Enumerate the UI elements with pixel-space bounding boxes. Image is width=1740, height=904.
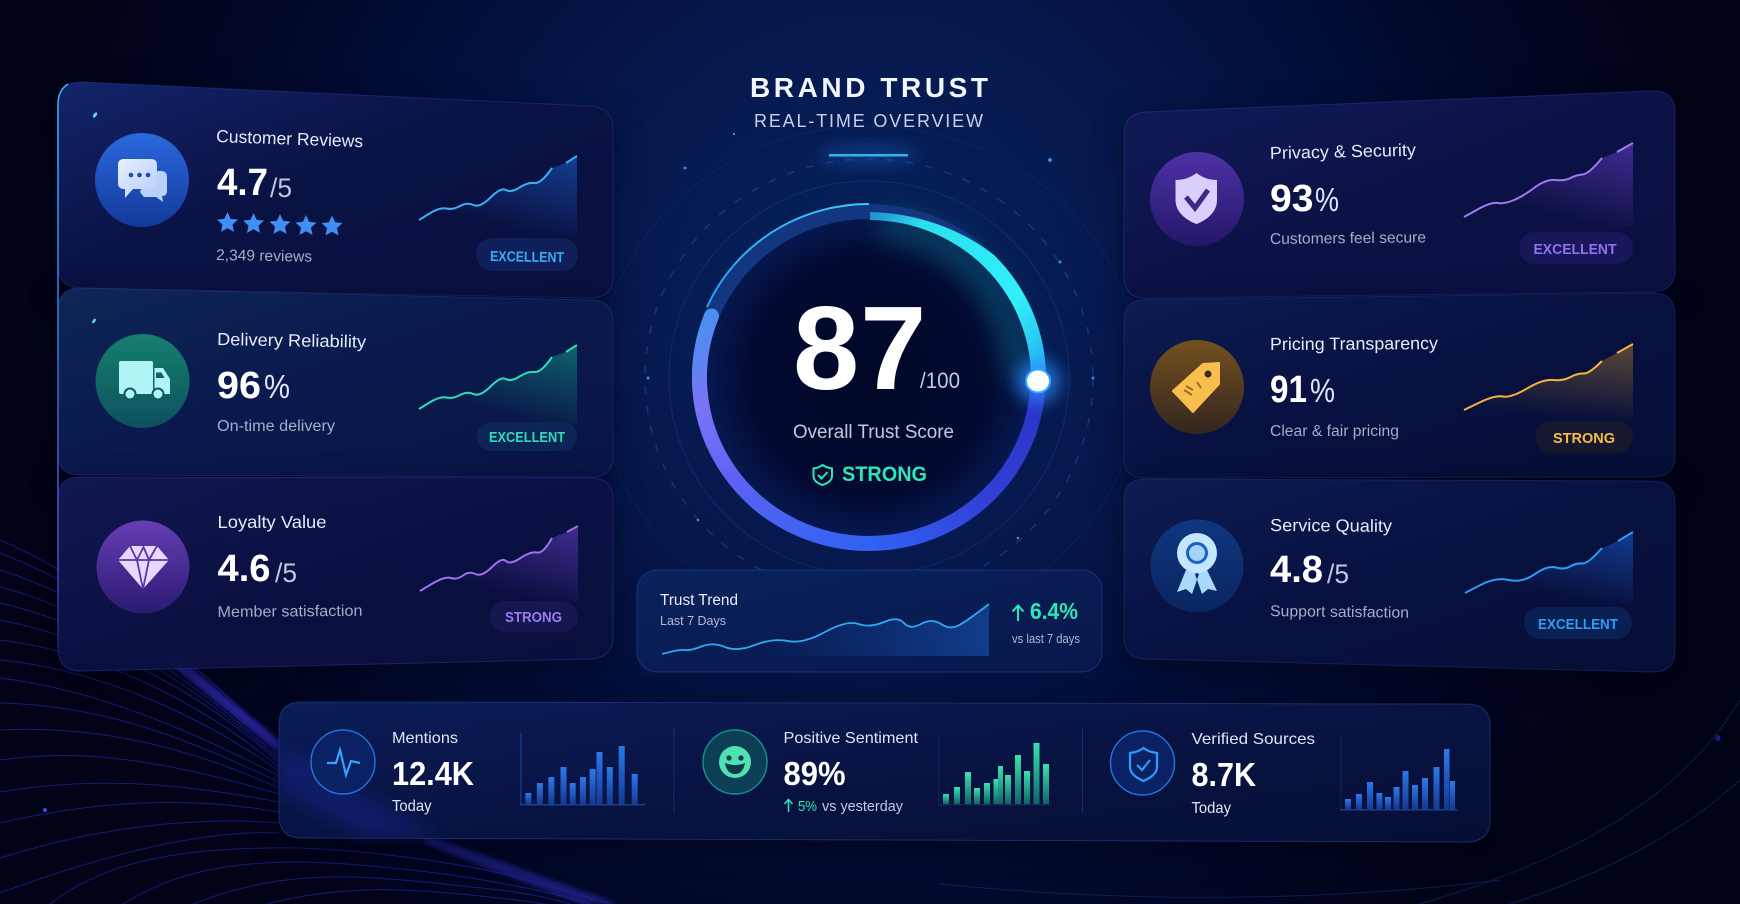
metric: 4.8 out of 5: 4.8 <box>1270 549 1323 591</box>
caption: last 7 days: Last 7 Days <box>660 613 726 628</box>
bar chart: sentiment <box>938 733 1052 806</box>
score label: Overall Trust Score <box>793 422 954 443</box>
background arcs: bottom right <box>940 700 1740 904</box>
trend value: 6.4% <box>1030 598 1078 624</box>
arrow: trend up <box>1012 606 1024 621</box>
badge: excellent <box>1524 607 1632 639</box>
metric: 4.8 out of 5: /5 <box>1327 559 1349 589</box>
sparkline: reviews <box>419 156 577 236</box>
heading: pricing transparency: Pricing Transparency <box>1270 333 1438 354</box>
icon: pulse <box>311 730 375 794</box>
badge: excellent: EXCELLENT <box>489 430 565 446</box>
badge: excellent: EXCELLENT <box>490 249 564 266</box>
icon: diamond <box>96 520 190 614</box>
heading: privacy and security: Privacy & Security <box>1270 140 1416 163</box>
metric: 96 percent: % <box>264 368 290 405</box>
panel: loyalty value <box>58 477 613 671</box>
status: strong: STRONG <box>842 463 927 486</box>
metric: 4.8 out of 5 <box>1270 549 1349 591</box>
panel: customer reviews <box>58 82 613 298</box>
sparkline: privacy <box>1464 143 1633 226</box>
sparkline: delivery <box>419 345 577 425</box>
trend comparison: vs last 7 days <box>1012 632 1080 646</box>
gauge knob <box>1016 359 1060 403</box>
stat label: mentions: Mentions <box>392 730 458 747</box>
panel: pricing transparency <box>1124 293 1675 478</box>
icon: chat bubbles <box>95 133 189 227</box>
sparkline: loyalty <box>420 526 578 602</box>
badge: excellent <box>1519 232 1633 264</box>
score value: 87 <box>793 282 927 415</box>
metric: 93 percent: % <box>1315 181 1339 218</box>
badge: strong: STRONG <box>505 610 562 626</box>
badge: excellent <box>477 422 577 451</box>
score scale: /100 <box>920 368 960 393</box>
stat label: verified sources: Verified Sources <box>1192 731 1315 748</box>
stat value: 12.4K: 12.4K <box>392 755 474 792</box>
bar chart: verified sources <box>1340 735 1458 810</box>
panel: delivery reliability <box>58 288 613 477</box>
panel: bottom stats bar <box>279 702 1490 842</box>
stat value: 89%: 89% <box>784 755 846 792</box>
caption: on-time delivery: On-time delivery <box>217 418 335 435</box>
metric: 91 percent: % <box>1310 372 1335 409</box>
stat note: up 5 percent vs yesterday: 5% <box>798 798 817 815</box>
metric: 96 percent <box>217 365 290 407</box>
badge: strong <box>490 601 578 632</box>
metric: 91 percent: 91 <box>1270 369 1307 411</box>
stat note: up 5 percent vs yesterday: vs yesterday <box>822 798 903 815</box>
sparkline: pricing <box>1464 344 1633 426</box>
caption: support satisfaction: Support satisfaction <box>1270 603 1409 622</box>
caption: clear and fair pricing: Clear & fair pricing <box>1270 423 1399 440</box>
icon: award ribbon <box>1150 520 1244 612</box>
heading: service quality: Service Quality <box>1270 515 1392 536</box>
metric: 4.6 out of 5: 4.6 <box>218 548 270 590</box>
icon: smiling face <box>703 730 767 794</box>
panel: service quality <box>1124 479 1675 672</box>
heading: delivery reliability: Delivery Reliability <box>217 329 367 352</box>
caption: customers feel secure: Customers feel secure <box>1270 229 1426 248</box>
rating stars <box>217 212 342 235</box>
metric: 96 percent: 96 <box>217 365 261 407</box>
background waves: bottom left <box>0 540 620 904</box>
title: BRAND TRUST <box>750 72 988 103</box>
badge: excellent: EXCELLENT <box>1534 242 1617 258</box>
metric: 4.6 out of 5: /5 <box>275 558 297 588</box>
icon: delivery truck <box>96 334 190 428</box>
panel: privacy and security <box>1124 91 1675 298</box>
caption: member satisfaction: Member satisfaction <box>217 603 363 621</box>
icon: shield <box>1150 152 1244 246</box>
title underline <box>819 145 919 165</box>
metric: 4.7 out of 5: /5 <box>270 173 292 203</box>
left edge light line <box>58 84 98 648</box>
line chart: trend <box>662 604 989 656</box>
stat value: 8.7K: 8.7K <box>1192 756 1256 793</box>
heading: loyalty value: Loyalty Value <box>218 512 326 532</box>
metric: 91 percent <box>1270 369 1335 411</box>
panel: trust trend <box>637 570 1102 672</box>
metric: 4.7 out of 5: 4.7 <box>217 162 268 204</box>
stat note: up 5 percent vs yesterday <box>784 798 903 815</box>
icon: strong shield <box>814 465 832 485</box>
badge: excellent <box>476 238 578 271</box>
subtitle: REAL-TIME OVERVIEW <box>754 111 983 131</box>
metric: 93 percent: 93 <box>1270 178 1314 220</box>
stat note: today: Today <box>392 798 432 815</box>
gauge: overall trust score <box>699 204 1060 543</box>
badge: excellent: EXCELLENT <box>1538 617 1618 633</box>
heading: customer reviews: Customer Reviews <box>216 126 364 151</box>
badge: strong: STRONG <box>1553 431 1615 447</box>
icon: verified shield <box>1110 731 1174 795</box>
stat note: today: Today <box>1192 800 1231 817</box>
icon: price tag <box>1150 340 1244 434</box>
bar chart: mentions <box>520 733 645 806</box>
badge: strong <box>1536 421 1633 453</box>
heading: trust trend: Trust Trend <box>660 592 738 609</box>
metric: 4.6 out of 5 <box>218 548 297 590</box>
review count: 2,349 reviews <box>216 247 312 266</box>
stat label: positive sentiment: Positive Sentiment <box>784 730 919 747</box>
sparkline: service <box>1465 532 1633 604</box>
concentric radar rings <box>599 126 1139 630</box>
metric: 93 percent <box>1270 178 1339 220</box>
